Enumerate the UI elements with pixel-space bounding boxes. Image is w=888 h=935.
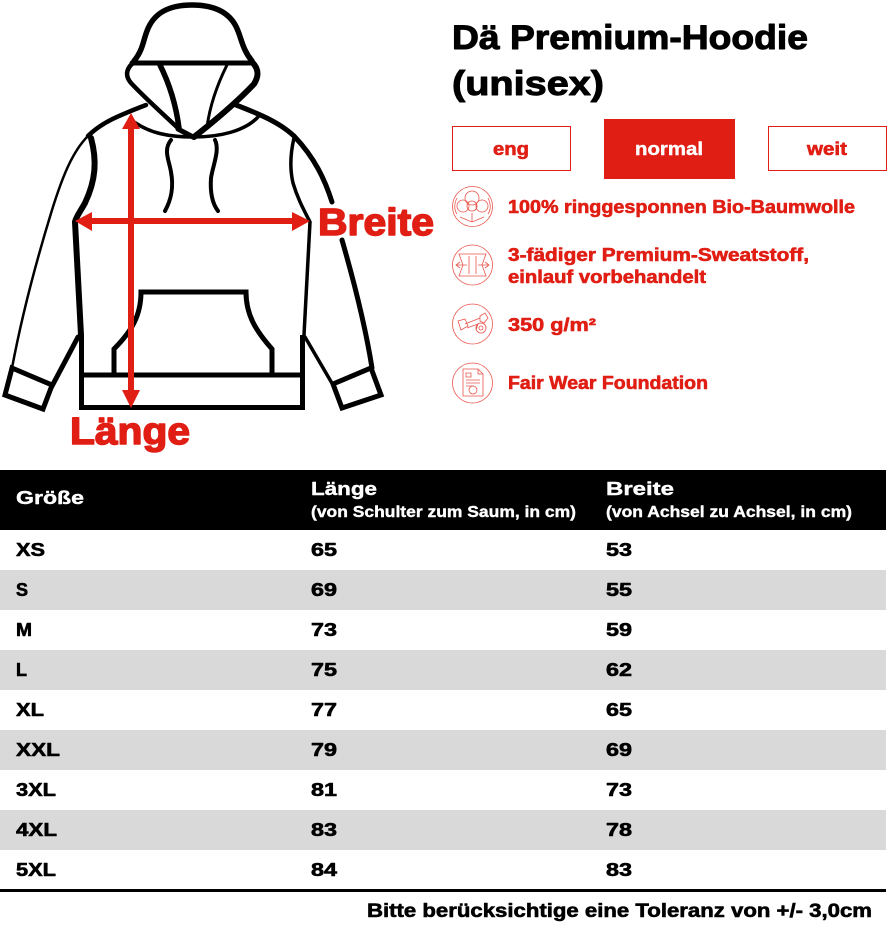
row XS: 53: [606, 540, 632, 560]
fit selector: [452, 119, 886, 179]
row XS: 65: [311, 540, 337, 560]
row L: 62: [606, 660, 632, 680]
table header: [0, 470, 886, 530]
row 3XL: 81: [311, 780, 337, 800]
row L: L: [16, 660, 27, 680]
feature text: certificate: Fair Wear Foundation: [508, 373, 708, 393]
feature text: cotton: 100% ringgesponnen Bio-Baumwolle: [508, 197, 855, 217]
row 4XL: 4XL: [16, 820, 57, 840]
row S: 69: [311, 580, 337, 600]
row S: S: [16, 580, 28, 600]
fit: normal (active): normal: [635, 139, 703, 159]
icon: fabric: [452, 245, 492, 285]
row XL: 77: [311, 700, 337, 720]
features list: [452, 186, 855, 403]
row XXL: 69: [606, 740, 632, 760]
fit: normal (active): [604, 119, 735, 179]
row 5XL: [16, 860, 632, 880]
arrow: length: [122, 113, 140, 408]
label: Breite: Breite: [318, 202, 434, 244]
arrow: width: [75, 212, 310, 231]
row M: M: [16, 620, 32, 640]
icon: certificate: [452, 363, 492, 403]
drawstrings: [165, 140, 218, 211]
fit: eng: eng: [493, 139, 529, 159]
tolerance note: Bitte berücksichtige eine Toleranz von +/- 3,0cm: [367, 901, 872, 922]
hem and pocket: [82, 292, 302, 375]
shoulders and sleeves: [12, 105, 372, 368]
row M: [16, 620, 632, 640]
table header: Breite: [606, 479, 674, 499]
icon: weight: [452, 304, 492, 344]
title: Dä Premium-Hoodie: [452, 19, 808, 57]
row XS: XS: [16, 540, 45, 560]
row 4XL: 78: [606, 820, 632, 840]
title: [452, 19, 808, 103]
row 3XL: 3XL: [16, 780, 56, 800]
feature text: fabric: einlauf vorbehandelt: [508, 267, 706, 287]
feature text: weight: 350 g/m²: [508, 315, 596, 335]
row XXL: [0, 730, 886, 770]
table header: (von Achsel zu Achsel, in cm): [606, 504, 852, 521]
feature text: fabric: [508, 245, 809, 287]
row XXL: 79: [311, 740, 337, 760]
row M: 73: [311, 620, 337, 640]
row XL: 65: [606, 700, 632, 720]
cuffs: [5, 337, 381, 409]
hood: [127, 5, 258, 137]
fit: weit: [768, 126, 886, 170]
hoodie line drawing: [5, 5, 381, 410]
table header: Länge: [311, 479, 377, 499]
row M: 59: [606, 620, 632, 640]
row L: [0, 650, 886, 690]
size table: [0, 470, 886, 892]
row S: 55: [606, 580, 632, 600]
row L: 75: [311, 660, 337, 680]
row 4XL: [0, 810, 886, 850]
row XL: XL: [16, 700, 44, 720]
row XXL: XXL: [16, 740, 60, 760]
fit: eng: [452, 126, 570, 170]
row XS: [16, 540, 632, 560]
body outline: [75, 138, 310, 410]
row 3XL: 73: [606, 780, 632, 800]
row S: [0, 570, 886, 610]
row 5XL: 84: [311, 860, 337, 880]
row XL: [16, 700, 632, 720]
icon: cotton: [452, 186, 492, 226]
row 4XL: 83: [311, 820, 337, 840]
row 3XL: [16, 780, 632, 800]
label: Länge: Länge: [70, 411, 190, 453]
row 5XL: 83: [606, 860, 632, 880]
row 5XL: 5XL: [16, 860, 56, 880]
table header: Größe: [16, 488, 84, 508]
feature text: fabric: 3-fädiger Premium-Sweatstoff,: [508, 245, 809, 265]
title: (unisex): [452, 65, 604, 103]
table header: (von Schulter zum Saum, in cm): [311, 504, 576, 521]
fit: weit: weit: [806, 139, 847, 159]
